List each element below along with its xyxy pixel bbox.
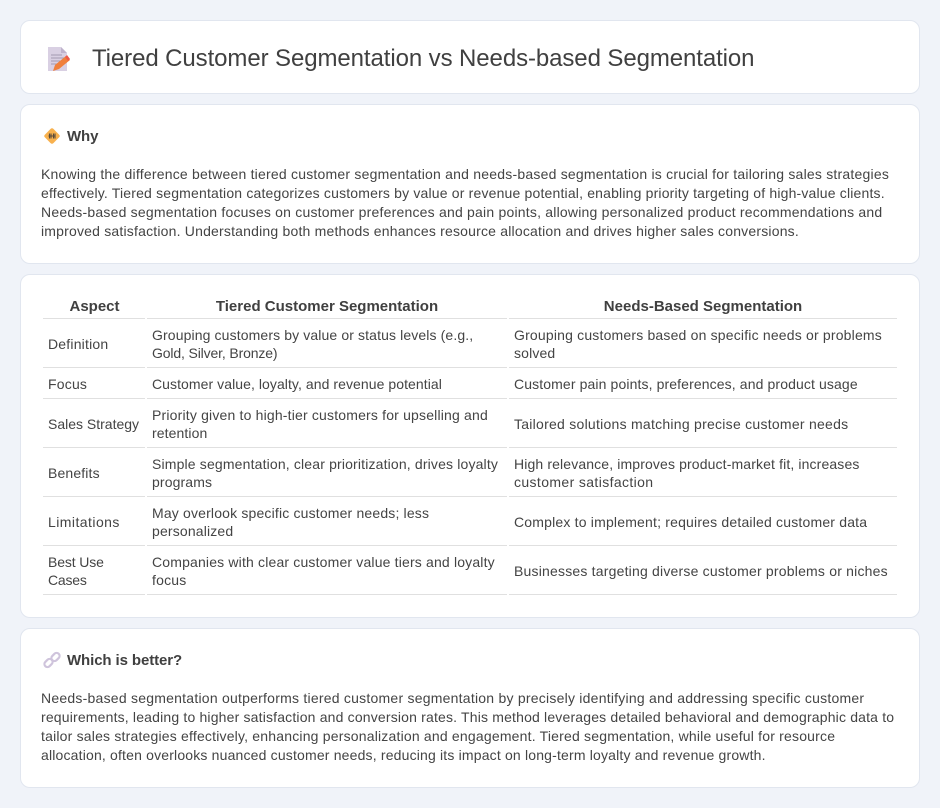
row: limitations: Complex to implement; requires detailed customer data xyxy=(514,514,867,530)
table header: Needs-Based Segmentation xyxy=(604,298,802,315)
text block: which is better xyxy=(41,690,894,763)
table header: Tiered Customer Segmentation xyxy=(216,298,438,315)
icon: diamond sign xyxy=(44,128,60,144)
title: Tiered Customer Segmentation vs Needs-based Segmentation xyxy=(92,45,754,72)
row: sales strategy: retention xyxy=(152,425,207,441)
row: limitations: Limitations xyxy=(48,514,120,530)
panel: which is better xyxy=(20,628,920,788)
row: benefits: Simple segmentation, clear prioritization, drives loyalty xyxy=(152,456,498,472)
row: benefits xyxy=(48,456,860,490)
text block: why xyxy=(41,166,889,239)
icon: chain link xyxy=(43,652,61,668)
row: benefits: Benefits xyxy=(48,465,100,481)
heading: why: Why xyxy=(67,128,98,145)
row: focus: Customer pain points, preferences, and product usage xyxy=(514,376,858,392)
heading: which is better: Which is better? xyxy=(67,652,182,669)
row: best use cases: Businesses targeting diverse customer problems or niches xyxy=(514,563,888,579)
row: sales strategy xyxy=(48,407,848,441)
text block: which is better: tailor sales strategies effectively, enhancing personalization and engagement. Tiered segmentation, while useful for resource xyxy=(41,728,835,744)
row: focus: Focus xyxy=(48,376,87,392)
row: benefits: programs xyxy=(152,474,212,490)
row: best use cases: Best Use xyxy=(48,554,104,570)
row: definition: Grouping customers by value or status levels (e.g., xyxy=(152,327,473,343)
row: limitations: May overlook specific customer needs; less xyxy=(152,505,429,521)
panel: comparison table xyxy=(20,274,920,618)
row: focus xyxy=(48,376,858,392)
row: limitations: personalized xyxy=(152,523,233,539)
row: best use cases: focus xyxy=(152,572,186,588)
row: best use cases xyxy=(48,554,888,588)
row: definition: Grouping customers based on specific needs or problems xyxy=(514,327,882,343)
row: benefits: customer satisfaction xyxy=(514,474,653,490)
panel: header xyxy=(20,20,920,94)
row: best use cases: Cases xyxy=(48,572,87,588)
row: definition: Definition xyxy=(48,336,108,352)
row: limitations xyxy=(48,505,868,539)
row: best use cases: Companies with clear customer value tiers and loyalty xyxy=(152,554,495,570)
row: definition: solved xyxy=(514,345,555,361)
text block: why: Needs-based segmentation focuses on customer preferences and pain points, allowing personalized product recommendations and xyxy=(41,204,882,220)
row: benefits: High relevance, improves product-market fit, increases xyxy=(514,456,860,472)
row: focus: Customer value, loyalty, and revenue potential xyxy=(152,376,442,392)
text block: which is better: Needs-based segmentation outperforms tiered customer segmentation by precisely identifying and addressing specific customer xyxy=(41,690,864,706)
icon: document with pencil xyxy=(48,47,70,71)
row: definition: Gold, Silver, Bronze) xyxy=(152,345,277,361)
text block: which is better: requirements, leading to higher satisfaction and conversion rates. This method leverages detailed behavioral and demographic data to xyxy=(41,709,894,725)
table header xyxy=(69,298,802,315)
table header: Aspect xyxy=(69,298,120,315)
panel: why xyxy=(20,104,920,264)
row: definition xyxy=(48,327,882,361)
row: sales strategy: Sales Strategy xyxy=(48,416,139,432)
text block: why: effectively. Tiered segmentation categorizes customers by value or revenue potential, enabling priority targeting of high-value clients. xyxy=(41,185,885,201)
text block: why: improved satisfaction. Understanding both methods enhances resource allocation and drives higher sales conversions. xyxy=(41,223,799,239)
row: sales strategy: Tailored solutions matching precise customer needs xyxy=(514,416,848,432)
text block: why: Knowing the difference between tiered customer segmentation and needs-based segmentation is crucial for tailoring sales strategies xyxy=(41,166,889,182)
text block: which is better: allocation, often overlooks nuanced customer needs, reducing its impact on long-term loyalty and revenue growth. xyxy=(41,747,766,763)
row: sales strategy: Priority given to high-tier customers for upselling and xyxy=(152,407,488,423)
